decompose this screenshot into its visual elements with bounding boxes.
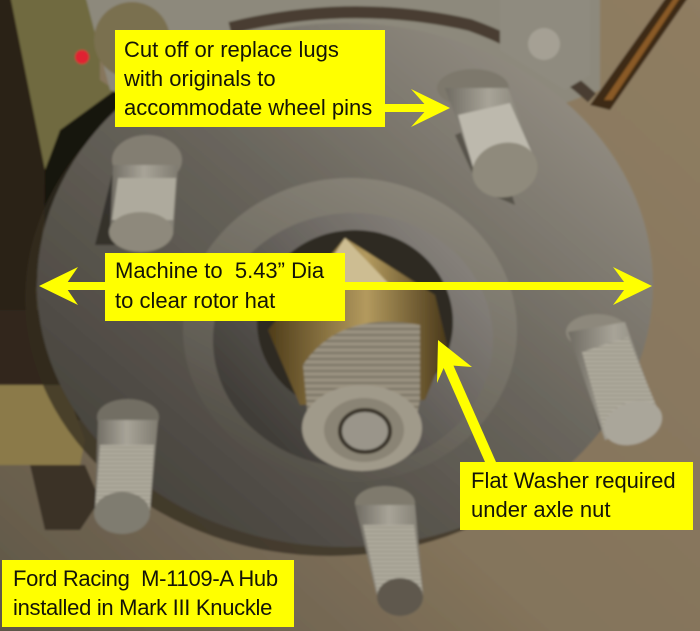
callout: machine diameter: to clear rotor hat <box>115 288 275 313</box>
hub disc <box>37 23 653 547</box>
disc shadow <box>25 40 635 556</box>
callout: hub title: installed in Mark III Knuckle <box>13 595 272 620</box>
callout: hub title: Ford Racing M-1109-A Hub <box>13 566 278 591</box>
axle shaft <box>268 238 447 471</box>
wheel studs <box>94 69 668 616</box>
arrow: to wheel pin <box>385 89 450 127</box>
callout: flat washer: under axle nut <box>471 497 610 522</box>
callout: hub title <box>2 560 294 627</box>
callout: lugs: accommodate wheel pins <box>124 95 372 120</box>
callout: lugs <box>115 30 385 127</box>
center bore <box>183 178 517 482</box>
callout: flat washer <box>460 462 693 530</box>
callout: machine diameter <box>105 253 345 321</box>
callout: lugs: Cut off or replace lugs <box>124 37 339 62</box>
callout: flat washer: Flat Washer required <box>471 468 676 493</box>
callout: lugs: with originals to <box>124 66 276 91</box>
callout: machine diameter: Machine to 5.43” Dia <box>115 258 324 283</box>
arrow: to flat washer <box>437 340 496 462</box>
arrow: diameter dimension <box>39 267 652 305</box>
